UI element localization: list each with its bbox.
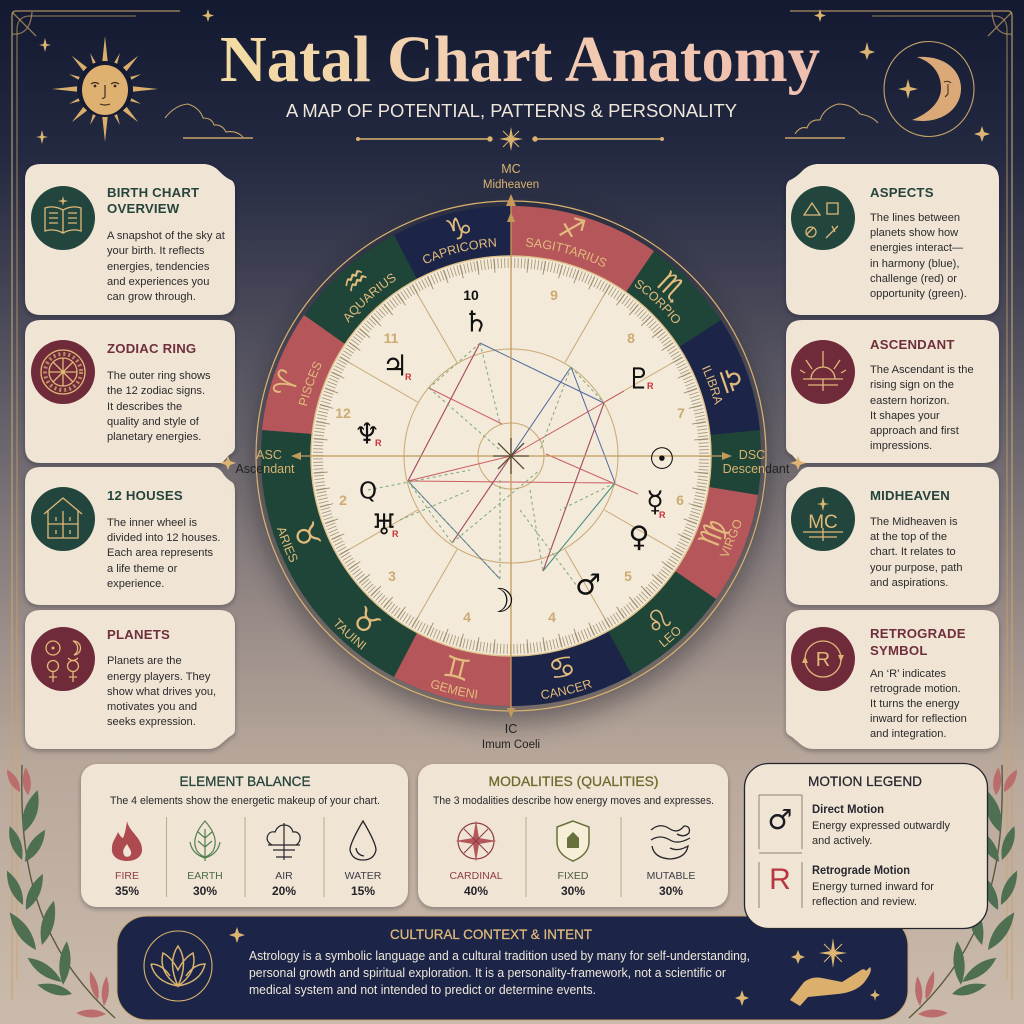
text: birth chart body: and experiences you [107,276,209,288]
subtitle: A MAP OF POTENTIAL, PATTERNS & PERSONALITY [286,100,737,121]
icon: sun [52,36,158,142]
text: zodiac ring body: It describes the [107,401,182,413]
icon: lotus [144,931,212,1001]
text: houses body: a life theme or [107,563,178,575]
text: legend direct [812,804,950,847]
title ornament [356,127,664,151]
zodiac glyphs: ♌︎ [637,600,681,644]
label: ASC: ASC [256,448,282,462]
text: planets body [107,655,216,728]
text: birth chart body [107,230,225,303]
label: IC [482,722,540,751]
icon: air: 20% [272,884,296,898]
icon: R in circle: R [816,649,830,671]
panel: aspects [786,164,999,315]
zodiac labels: TAUINI [334,618,366,650]
zodiac labels [276,238,745,699]
panel: motion legend: MOTION LEGEND [808,773,922,789]
label: ASC [235,448,295,476]
icon: water: WATER [345,870,382,882]
zodiac glyphs: ♐︎ [554,209,589,250]
house numbers: 2 [339,492,347,508]
zodiac labels: ILIBRA [702,365,722,405]
text: ascendant body: eastern horizon. [870,395,950,407]
text: zodiac ring body: the 12 zodiac signs. [107,385,205,397]
panel: motion legend [744,764,988,928]
title: Natal Chart Anatomy [220,23,820,96]
text: ascendant body: The Ascendant is the [870,364,974,376]
zodiac labels: PISCES [298,362,322,406]
icon: hand with star [735,938,880,1006]
zodiac labels: VIRGO [717,517,745,560]
panel: modalities [418,764,728,907]
planet glyphs: ☿︎ [646,484,664,518]
chart: natal wheel [244,194,778,738]
panel: ascendant [786,320,999,463]
icon: open book [31,186,95,250]
text: retrograde body: An ‘R’ indicates [870,668,947,680]
panel: planets [25,610,235,749]
text: aspects body: The lines between [870,212,960,224]
planet glyphs: ☽︎ [485,581,515,620]
text: ascendant body: approach and first [870,425,959,437]
zodiac labels: SAGITTARIUS [526,238,606,267]
text: midheaven body: chart. It relates to [870,546,956,558]
planet glyphs: R [405,372,412,382]
panel: aspects: ASPECTS [870,185,934,200]
icon: fixed: 30% [561,884,585,898]
text: legend retrograde [812,865,934,908]
house numbers: 10 [463,287,479,303]
decoration: right branch [909,765,1022,1018]
planet glyphs: R [375,438,382,448]
text: midheaven body: The Midheaven is [870,516,958,528]
panel: 12 houses [25,467,235,605]
icon: cardinal: CARDINAL [449,870,503,882]
icon: rising sun [791,340,855,404]
icon: fire [112,821,142,898]
planet glyphs: Q [359,478,377,504]
text: midheaven body [870,516,963,589]
text: aspects body: opportunity (green). [870,288,967,300]
panel: cultural context [117,916,908,1020]
text: planets body: Planets are the [107,655,182,667]
panel: modalities: The 3 modalities describe how energy moves and expresses. [433,795,714,807]
panel: element balance: ELEMENT BALANCE [180,773,310,789]
house numbers: 4 [463,609,471,625]
zodiac glyphs: ♋︎ [545,648,580,688]
house numbers: 4 [548,609,556,625]
icon: earth: EARTH [187,870,223,882]
icon: earth: 30% [193,884,217,898]
text: aspects body: challenge (red) or [870,273,957,285]
text: zodiac ring body [107,370,211,443]
planet glyphs [354,304,675,620]
zodiac glyphs: ♏︎ [649,265,693,309]
text: zodiac ring body: quality and style of [107,416,200,428]
text: ascendant body: impressions. [870,440,932,452]
icon: cardinal: 40% [464,884,488,898]
text: legend direct: Energy expressed outwardly [812,820,950,832]
panel: zodiac ring [25,320,235,463]
text: legend direct: and actively. [812,835,872,847]
text: ascendant body: rising sign on the [870,379,954,391]
house cusps [350,295,672,617]
zodiac labels: ARIES [276,528,298,562]
clouds [165,104,878,138]
zodiac glyphs: ♊︎ [439,649,474,689]
text: birth chart body: energies, tendencies [107,261,210,273]
planet glyphs: ♃︎ [382,348,408,382]
house numbers: 3 [388,568,396,584]
label: IC: IC [505,722,517,736]
icon: fixed: FIXED [558,870,589,882]
icon: mutable: MUTABLE [647,870,695,882]
panel: birth chart overview [25,164,235,315]
panel: birth chart overview: BIRTH CHART [107,185,199,200]
planet glyphs: ♆︎ [354,416,380,450]
panel: cultural context: CULTURAL CONTEXT & INTENT [390,926,592,942]
panel: birth chart overview: OVERVIEW [107,201,180,216]
text: cultural body: personal growth and spiritual exploration. It is a personality-framework, not a scientific or [249,966,726,980]
icon: fire: 35% [115,884,139,898]
zodiac labels: GEMENI [431,680,478,698]
panel: retrograde symbol: SYMBOL [870,643,928,658]
icon: MC: MC [808,512,838,533]
text: aspects body: in harmony (blue), [870,258,959,270]
icon: aspect shapes [791,186,855,250]
icon: fire: FIRE [115,870,139,882]
label: DSC [723,448,790,476]
text: cultural body [249,949,750,997]
text: midheaven body: at the top of the [870,531,947,543]
zodiac glyphs: ♎︎ [710,362,752,399]
text: zodiac ring body: The outer ring shows [107,370,211,382]
icon: direct motion: ♂︎ [767,803,793,836]
text: legend retrograde: Retrograde Motion [812,865,910,877]
text: cultural body: medical system and not intended to predict or determine events. [249,983,596,997]
text: retrograde body: It turns the energy [870,698,960,710]
text: legend direct: Direct Motion [812,804,884,816]
zodiac labels: AQUARIUS [344,274,396,323]
planet glyphs: R [647,381,654,391]
planet glyphs: ♂︎ [575,567,601,601]
panel: retrograde symbol: RETROGRADE [870,626,966,641]
text: ascendant body: It shapes your [870,410,940,422]
text: planets body: seeks expression. [107,716,196,728]
zodiac labels: CAPRICORN [423,238,496,264]
house numbers: 8 [627,330,635,346]
icon: water [345,821,382,898]
icon: cardinal [449,820,503,898]
icon: retrograde R: R [769,863,791,896]
zodiac glyphs: ♉︎ [344,600,387,644]
zodiac glyphs: ♑︎ [442,209,477,249]
zodiac glyphs [266,209,752,689]
panel: midheaven [786,467,999,605]
house numbers: 5 [624,568,632,584]
zodiac labels: LEO [658,627,680,648]
icon: planet symbols [31,627,95,691]
zodiac glyphs: ♒︎ [334,259,378,303]
text: houses body: divided into 12 houses. [107,532,220,544]
text: houses body: Each area represents [107,547,214,559]
zodiac glyphs: ♉︎ [285,517,327,554]
zodiac ring sectors [261,206,761,706]
aspect lines [368,343,638,590]
icon: R in circle [791,627,855,691]
icon: mutable: 30% [659,884,683,898]
house numbers: 6 [676,492,684,508]
text: zodiac ring body: planetary energies. [107,431,201,443]
icon: moon [884,42,974,136]
icon: MC [791,487,855,551]
text: legend retrograde: Energy turned inward for [812,881,934,893]
text: aspects body: energies interact— [870,242,964,254]
dial and ticks [311,256,711,656]
panel: zodiac ring: ZODIAC RING [107,341,196,356]
text: birth chart body: A snapshot of the sky at [107,230,225,242]
icon: earth [187,821,223,898]
planet glyphs: R [659,510,666,520]
zodiac labels: CANCER [541,680,592,699]
planet glyphs: ♇︎ [626,361,652,395]
icon: air [267,823,300,898]
zodiac glyphs: ♍︎ [692,514,734,553]
text: midheaven body: and aspirations. [870,577,948,589]
label: MC: MC [501,162,521,176]
icon: mutable [647,826,695,898]
sparkles: header [36,9,990,144]
text: planets body: energy players. They [107,671,211,683]
panel: element balance [81,764,408,907]
panel: retrograde symbol [786,610,999,749]
icon: house [31,487,95,551]
text: retrograde body: inward for reflection [870,713,967,725]
text: planets body: show what drives you, [107,686,216,698]
label: ASC: Ascendant [235,462,295,476]
planet glyphs: R [392,529,399,539]
text: cultural body: Astrology is a symbolic language and a cultural tradition used by many for self-understanding, [249,949,750,963]
house numbers: 12 [335,405,351,421]
planet glyphs: ♄︎ [463,304,489,338]
label: IC: Imum Coeli [482,739,540,751]
panel: ascendant: ASCENDANT [870,337,955,352]
zodiac glyphs: ♈︎ [266,365,308,402]
text: planets body: motivates you and [107,701,197,713]
house numbers: 11 [384,330,399,346]
panel: 12 houses: 12 HOUSES [107,488,183,503]
sparkle [229,927,245,943]
sparkles: axis [220,456,806,470]
icon: fixed [557,821,589,898]
panel: element balance: The 4 elements show the energetic makeup of your chart. [110,795,380,807]
text: aspects body [870,212,967,300]
label: MC: Midheaven [483,179,539,191]
text: birth chart body: can grow through. [107,291,196,303]
text: legend retrograde: reflection and review. [812,896,917,908]
text: ascendant body [870,364,974,452]
label: MC [483,162,539,191]
chart axes with arrows [291,194,732,718]
decoration: left branch [2,765,115,1018]
text: retrograde body: and integration. [870,728,946,740]
text: houses body: experience. [107,578,164,590]
house numbers [335,287,685,625]
text: aspects body: planets show how [870,227,959,239]
zodiac labels: SCORPIO [635,280,680,323]
icon: zodiac wheel [31,340,95,404]
text: houses body [107,517,220,590]
house numbers: 9 [550,287,558,303]
label: DSC: DSC [739,448,765,462]
label: DSC: Descendant [723,462,790,476]
house numbers: 7 [677,405,685,421]
text: retrograde body: retrograde motion. [870,683,961,695]
icon: water: 15% [351,884,375,898]
icon: air: AIR [275,870,293,882]
panel: planets: PLANETS [107,627,170,642]
panel: midheaven: MIDHEAVEN [870,488,950,503]
text: retrograde body [870,668,967,740]
planet glyphs: ♅︎ [371,507,397,541]
planet glyphs: ♀︎ [628,519,650,553]
planet glyphs: ☉︎ [649,442,675,477]
text: birth chart body: your birth. It reflects [107,245,205,257]
text: midheaven body: your purpose, path [870,562,963,574]
text: houses body: The inner wheel is [107,517,197,529]
panel: modalities: MODALITIES (QUALITIES) [488,773,658,789]
